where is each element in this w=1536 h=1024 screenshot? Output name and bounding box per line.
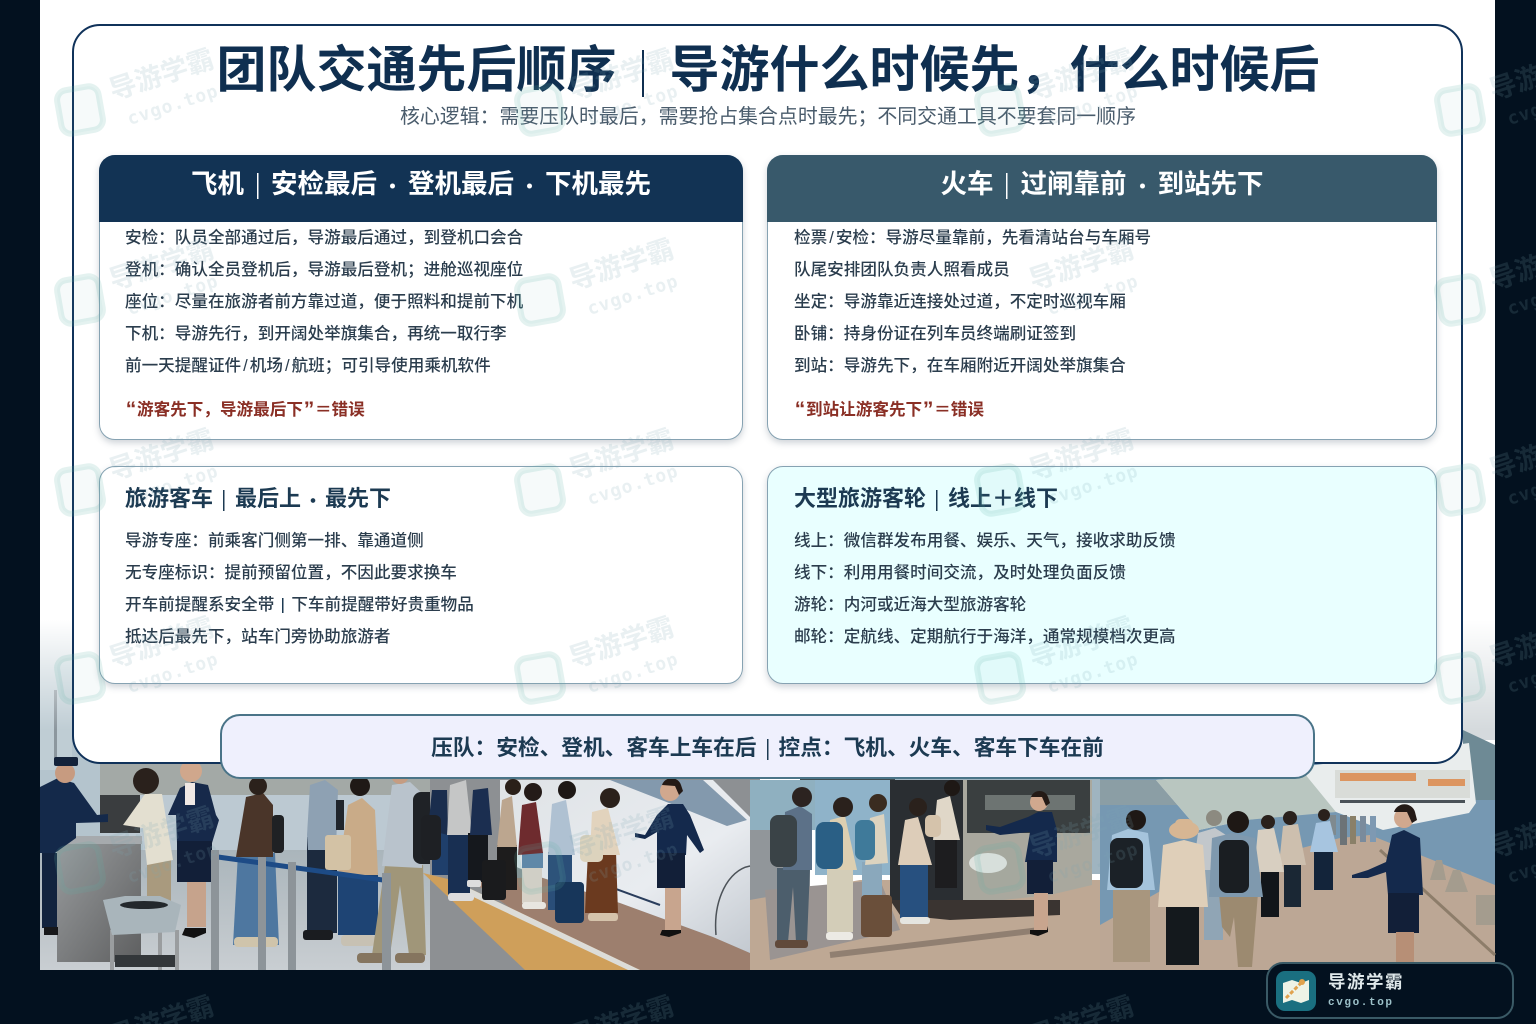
man at left of bus — [777, 868, 810, 942]
high-speed train scene — [421, 764, 820, 970]
train rule 3: 坐定：导游靠近连接处过道，不定时巡视车厢 — [794, 292, 1126, 311]
watermark grid: cvgo.top — [585, 649, 681, 698]
watermark grid: cvgo.top — [585, 81, 681, 130]
panel: coach — [99, 466, 743, 684]
coach bus scene — [750, 764, 1110, 970]
cruise rule 1: 线上：微信群发布用餐、娱乐、天气，接收求助反馈 — [794, 531, 1176, 550]
brand name: 导游学霸 — [1328, 972, 1404, 992]
airplane warning: ” — [304, 398, 314, 421]
watermark grid: 导游学霸 — [106, 424, 218, 486]
watermark grid: cvgo.top — [125, 271, 221, 320]
backpack man, blue — [1219, 893, 1258, 967]
watermark grid: 导游学霸 — [1026, 802, 1138, 864]
watermark grid: 导游学霸 — [566, 44, 678, 106]
airplane rule 5: 前一天提醒证件/机场/航班；可引导使用乘机软件 — [125, 356, 491, 375]
watermark grid: cvgo.top — [125, 81, 221, 130]
watermark grid: cvgo.top — [1045, 649, 1141, 698]
icon: folded map — [1276, 971, 1316, 1011]
summary bar: 压队：安检、登机、客车上车在后 控点：飞机、火车、客车下车在前 — [431, 735, 1104, 760]
watermark grid: 导游学霸 — [106, 612, 218, 674]
train header: 火车 过闸靠前 到站先下 — [940, 169, 1264, 199]
guide at train — [635, 804, 704, 855]
train warning: “ — [795, 398, 805, 421]
airplane rule 1: 安检：队员全部通过后，导游最后通过，到登机口会合 — [125, 228, 523, 247]
desk — [57, 838, 141, 962]
train header — [767, 155, 1437, 222]
queue at bus — [827, 868, 853, 932]
train rule 4: 卧铺：持身份证在列车员终端刷证签到 — [794, 324, 1076, 343]
watermark grid: 导游学霸 — [106, 44, 218, 106]
train rule 5: 到站：导游先下，在车厢附近开阔处举旗集合 — [794, 356, 1126, 375]
airplane warning: 游客先下，导游最后下 ＝错误 — [137, 400, 365, 419]
train warning: 到站让游客先下 ＝错误 — [806, 400, 984, 419]
bin — [110, 930, 114, 970]
woman in beige coat — [338, 873, 378, 935]
watermark grid: 导游学霸 — [106, 802, 218, 864]
airplane rule 4: 下机：导游先行，到开阔处举旗集合，再统一取行李 — [125, 324, 507, 343]
woman with hat — [1166, 905, 1199, 965]
pier bollards — [1430, 860, 1446, 880]
watermark grid: 导游学霸 — [1026, 612, 1138, 674]
cruise ship scene — [1100, 620, 1495, 970]
airplane rule 2: 登机：确认全员登机后，导游最后登机；进舱巡视座位 — [125, 260, 523, 279]
coach rule 2: 无专座标识：提前预留位置，不因此要求换车 — [125, 563, 457, 582]
panel: train — [767, 155, 1437, 440]
brown jacket woman — [233, 853, 279, 945]
watermark grid: 导游学霸 — [1026, 234, 1138, 296]
airplane header — [99, 155, 743, 222]
cruise rule 3: 游轮：内河或近海大型旅游客轮 — [794, 595, 1026, 614]
walking passengers — [1314, 850, 1333, 890]
cruise heading: 大型旅游客轮 线上＋线下 — [794, 486, 1058, 511]
summary bar — [220, 714, 1315, 779]
man in blue-grey shirt — [307, 837, 337, 933]
panel: airplane — [99, 155, 743, 440]
train warning: ” — [923, 398, 933, 421]
watermark grid: 导游学霸 — [1026, 424, 1138, 486]
guide at bus — [986, 812, 1057, 862]
airplane header: 飞机 安检最后 登机最后 下机最先 — [191, 169, 651, 199]
subtitle: 核心逻辑：需要压队时最后，需要抢占集合点时最先；不同交通工具不要套同一顺序 — [400, 106, 1136, 128]
man with backpack — [372, 865, 426, 955]
watermark grid: 导游学霸 — [106, 234, 218, 296]
airplane rule 3: 座位：尽量在旅游者前方靠过道，便于照料和提前下机 — [125, 292, 523, 311]
logo badge — [1266, 962, 1514, 1019]
queue on platform — [432, 830, 448, 875]
watermark grid: cvgo.top — [585, 461, 681, 510]
distant passengers — [1330, 815, 1336, 835]
cruise rule 2: 线下：利用用餐时间交流，及时处理负面反馈 — [794, 563, 1126, 582]
train rule 1: 检票/安检：导游尽量靠前，先看清站台与车厢号 — [794, 228, 1151, 247]
watermark grid: 导游学霸 — [566, 234, 678, 296]
officer — [40, 778, 108, 853]
agent — [187, 880, 206, 927]
watermark grid: cvgo.top — [125, 461, 221, 510]
brand url: cvgo.top — [1328, 997, 1394, 1009]
coach rule 1: 导游专座：前乘客门侧第一排、靠通道侧 — [125, 531, 424, 550]
watermark grid: 导游学霸 — [566, 612, 678, 674]
guide at pier — [1352, 830, 1423, 895]
watermark grid: cvgo.top — [585, 271, 681, 320]
cruise rule 4: 邮轮：定航线、定期航行于海洋，通常规模档次更高 — [794, 627, 1176, 646]
coach heading: 旅游客车 最后上 最先下 — [125, 486, 391, 511]
watermark grid: 导游学霸 — [566, 424, 678, 486]
man with black backpack — [1113, 890, 1150, 962]
coach rule 3: 开车前提醒系安全带 下车前提醒带好贵重物品 — [125, 595, 474, 614]
coach rule 4: 抵达后最先下，站车门旁协助旅游者 — [125, 627, 390, 646]
watermark grid: cvgo.top — [1045, 461, 1141, 510]
watermark grid: cvgo.top — [585, 839, 681, 888]
title: 团队交通先后顺序 导游什么时候先，什么时候后 — [216, 42, 1320, 98]
main white panel — [72, 24, 1463, 764]
watermark grid: cvgo.top — [125, 839, 221, 888]
watermark grid: 导游学霸 — [1026, 44, 1138, 106]
panel: cruise — [767, 466, 1437, 684]
watermark grid: cvgo.top — [1045, 271, 1141, 320]
stanchions and rope — [218, 857, 383, 880]
watermark grid: cvgo.top — [125, 649, 221, 698]
watermark grid: cvgo.top — [1045, 81, 1141, 130]
woman in cream — [147, 860, 171, 902]
airport scene — [40, 620, 440, 970]
train rule 2: 队尾安排团队负责人照看成员 — [794, 260, 1010, 279]
airplane warning: “ — [126, 398, 136, 421]
watermark grid: cvgo.top — [1045, 839, 1141, 888]
watermark grid: 导游学霸 — [566, 802, 678, 864]
